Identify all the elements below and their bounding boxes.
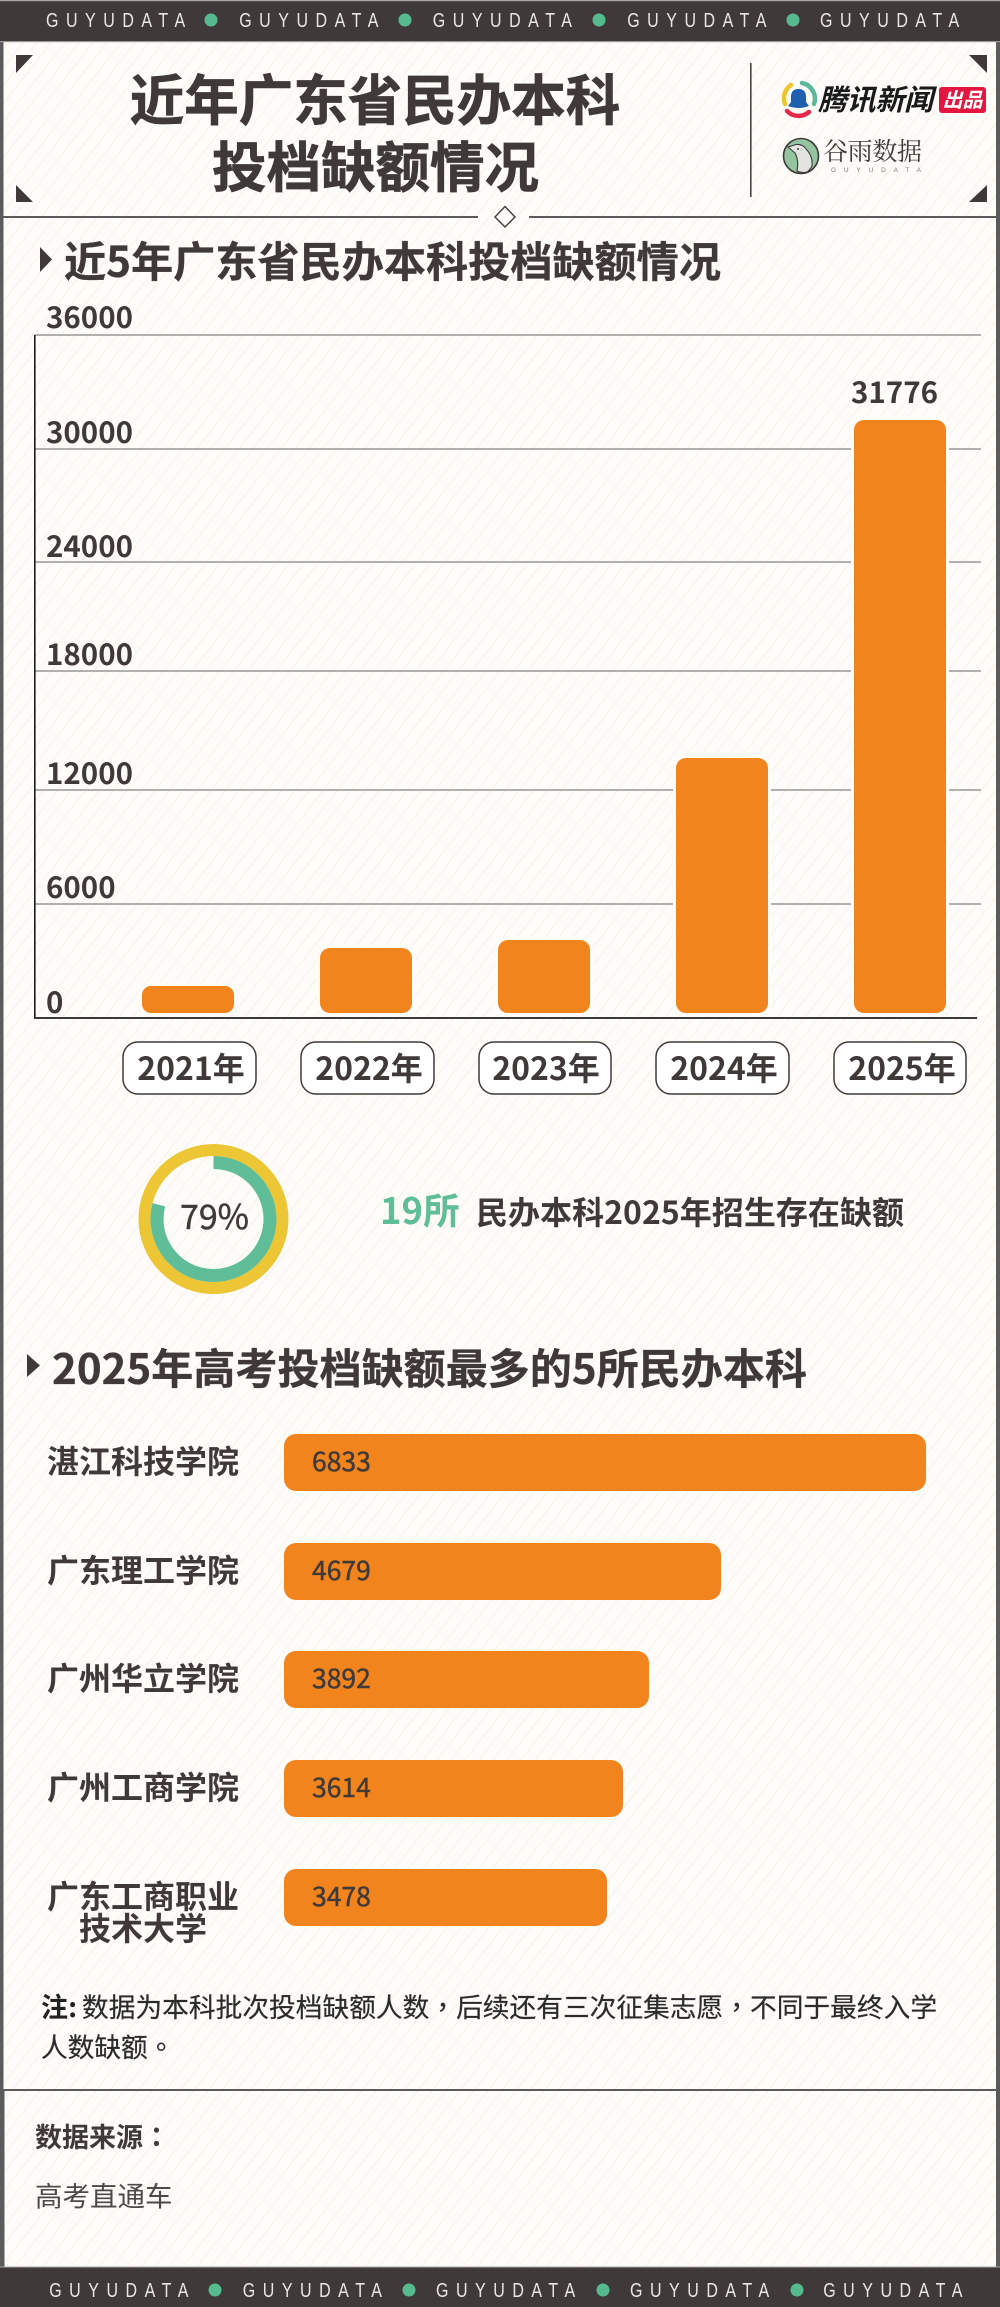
top brand band: GUYUDATA: [46, 9, 186, 31]
year labels: 2023年: [492, 1044, 600, 1090]
data source: 高考直通车: [35, 2174, 172, 2214]
year labels: 2024年: [670, 1044, 778, 1090]
year labels: 2022年: [315, 1044, 423, 1090]
y axis labels: 6000: [46, 865, 116, 907]
bottom brand band: GUYUDATA: [823, 2279, 963, 2301]
data source: [35, 2116, 172, 2214]
row: 广州华立学院: [47, 1651, 649, 1708]
value label 2025: 31776: [851, 370, 938, 412]
corner marks of header: [16, 55, 987, 202]
section heading: five-year chart: 近5年广东省民办本科投档缺额情况: [64, 229, 721, 290]
row: 广州华立学院: 广州华立学院: [47, 1654, 239, 1700]
bottom brand band: GUYUDATA: [630, 2279, 770, 2301]
y axis gridlines: [35, 334, 981, 905]
data source: 数据来源：: [35, 2116, 170, 2155]
top brand band: GUYUDATA: [820, 9, 960, 31]
row: 湛江科技学院: 湛江科技学院: [47, 1437, 239, 1483]
logo: Tencent News: 出品: [942, 84, 984, 113]
bar chart: shortfall 2021-2025: [34, 295, 981, 1022]
row: 广州工商学院: 3614: [312, 1766, 371, 1805]
bottom brand band: GUYUDATA: [49, 2279, 189, 2301]
title: 近年广东省民办本科: [130, 57, 620, 136]
callout: 19 schools: 19所: [380, 1182, 460, 1235]
note: 注:: [41, 1986, 77, 2025]
bottom brand band: GUYUDATA: [243, 2279, 383, 2301]
row: 广东理工学院: 广东理工学院: [47, 1546, 239, 1592]
year labels: [123, 1042, 966, 1094]
callout: 19 schools: 民办本科2025年招生存在缺额: [476, 1188, 904, 1234]
row: 广州华立学院: 3892: [312, 1657, 371, 1696]
header vertical divider: [750, 63, 752, 197]
section heading: top five schools: 2025年高考投档缺额最多的5所民办本科: [52, 1336, 807, 1397]
row: 广州工商学院: 广州工商学院: [47, 1763, 239, 1809]
row: 广东理工学院: [47, 1543, 721, 1600]
y axis labels: 18000: [46, 632, 133, 674]
y axis labels: 36000: [46, 295, 133, 337]
logo: Guyu Data: GUYUDATA: [831, 167, 922, 174]
logo: Tencent News: [784, 77, 986, 119]
row: 广东理工学院: 4679: [312, 1549, 371, 1588]
y axis labels: 24000: [46, 524, 133, 566]
donut chart: 79%: 79%: [180, 1190, 249, 1239]
y axis labels: 12000: [46, 751, 133, 793]
row: 湛江科技学院: 6833: [312, 1440, 371, 1479]
note: 人数缺额。: [41, 2026, 174, 2065]
header divider with diamond: [3, 206, 997, 227]
y axis labels: 30000: [46, 410, 133, 452]
top brand band: [0, 0, 1000, 42]
row: 广州工商学院: [47, 1760, 623, 1817]
logo: Guyu Data: [784, 132, 922, 174]
row: 广东工商职业技术大学: [47, 1869, 607, 1950]
logo: Guyu Data: 谷雨数据: [823, 132, 922, 168]
top brand band: GUYUDATA: [239, 9, 379, 31]
y axis labels: 0: [46, 980, 63, 1022]
row: 湛江科技学院: [47, 1434, 926, 1491]
top brand band: GUYUDATA: [433, 9, 573, 31]
year labels: 2021年: [137, 1044, 245, 1090]
year labels: 2025年: [848, 1044, 956, 1090]
title: 投档缺额情况: [212, 124, 539, 203]
icon: Tencent News ring and bell: [784, 83, 815, 116]
bottom brand band: GUYUDATA: [436, 2279, 576, 2301]
horizontal bar chart: top five schools: [47, 1434, 926, 1950]
title: [130, 57, 620, 203]
donut chart: 79%: [144, 1150, 282, 1288]
row: 广东工商职业技术大学: 广东工商职业: [47, 1872, 239, 1918]
row: 广东工商职业技术大学: 技术大学: [79, 1904, 207, 1950]
bottom brand band: [0, 2266, 1000, 2307]
icon: bird in circle: [784, 138, 818, 174]
y axis labels: [46, 295, 133, 1022]
note: [41, 1986, 937, 2065]
logo: Tencent News: 腾讯新闻: [818, 77, 938, 119]
bars: [139, 417, 949, 1016]
section divider: [3, 2089, 997, 2091]
row: 广东工商职业技术大学: 3478: [312, 1875, 371, 1914]
top brand band: GUYUDATA: [627, 9, 767, 31]
note: 数据为本科批次投档缺额人数，后续还有三次征集志愿，不同于最终入学: [82, 1986, 937, 2025]
